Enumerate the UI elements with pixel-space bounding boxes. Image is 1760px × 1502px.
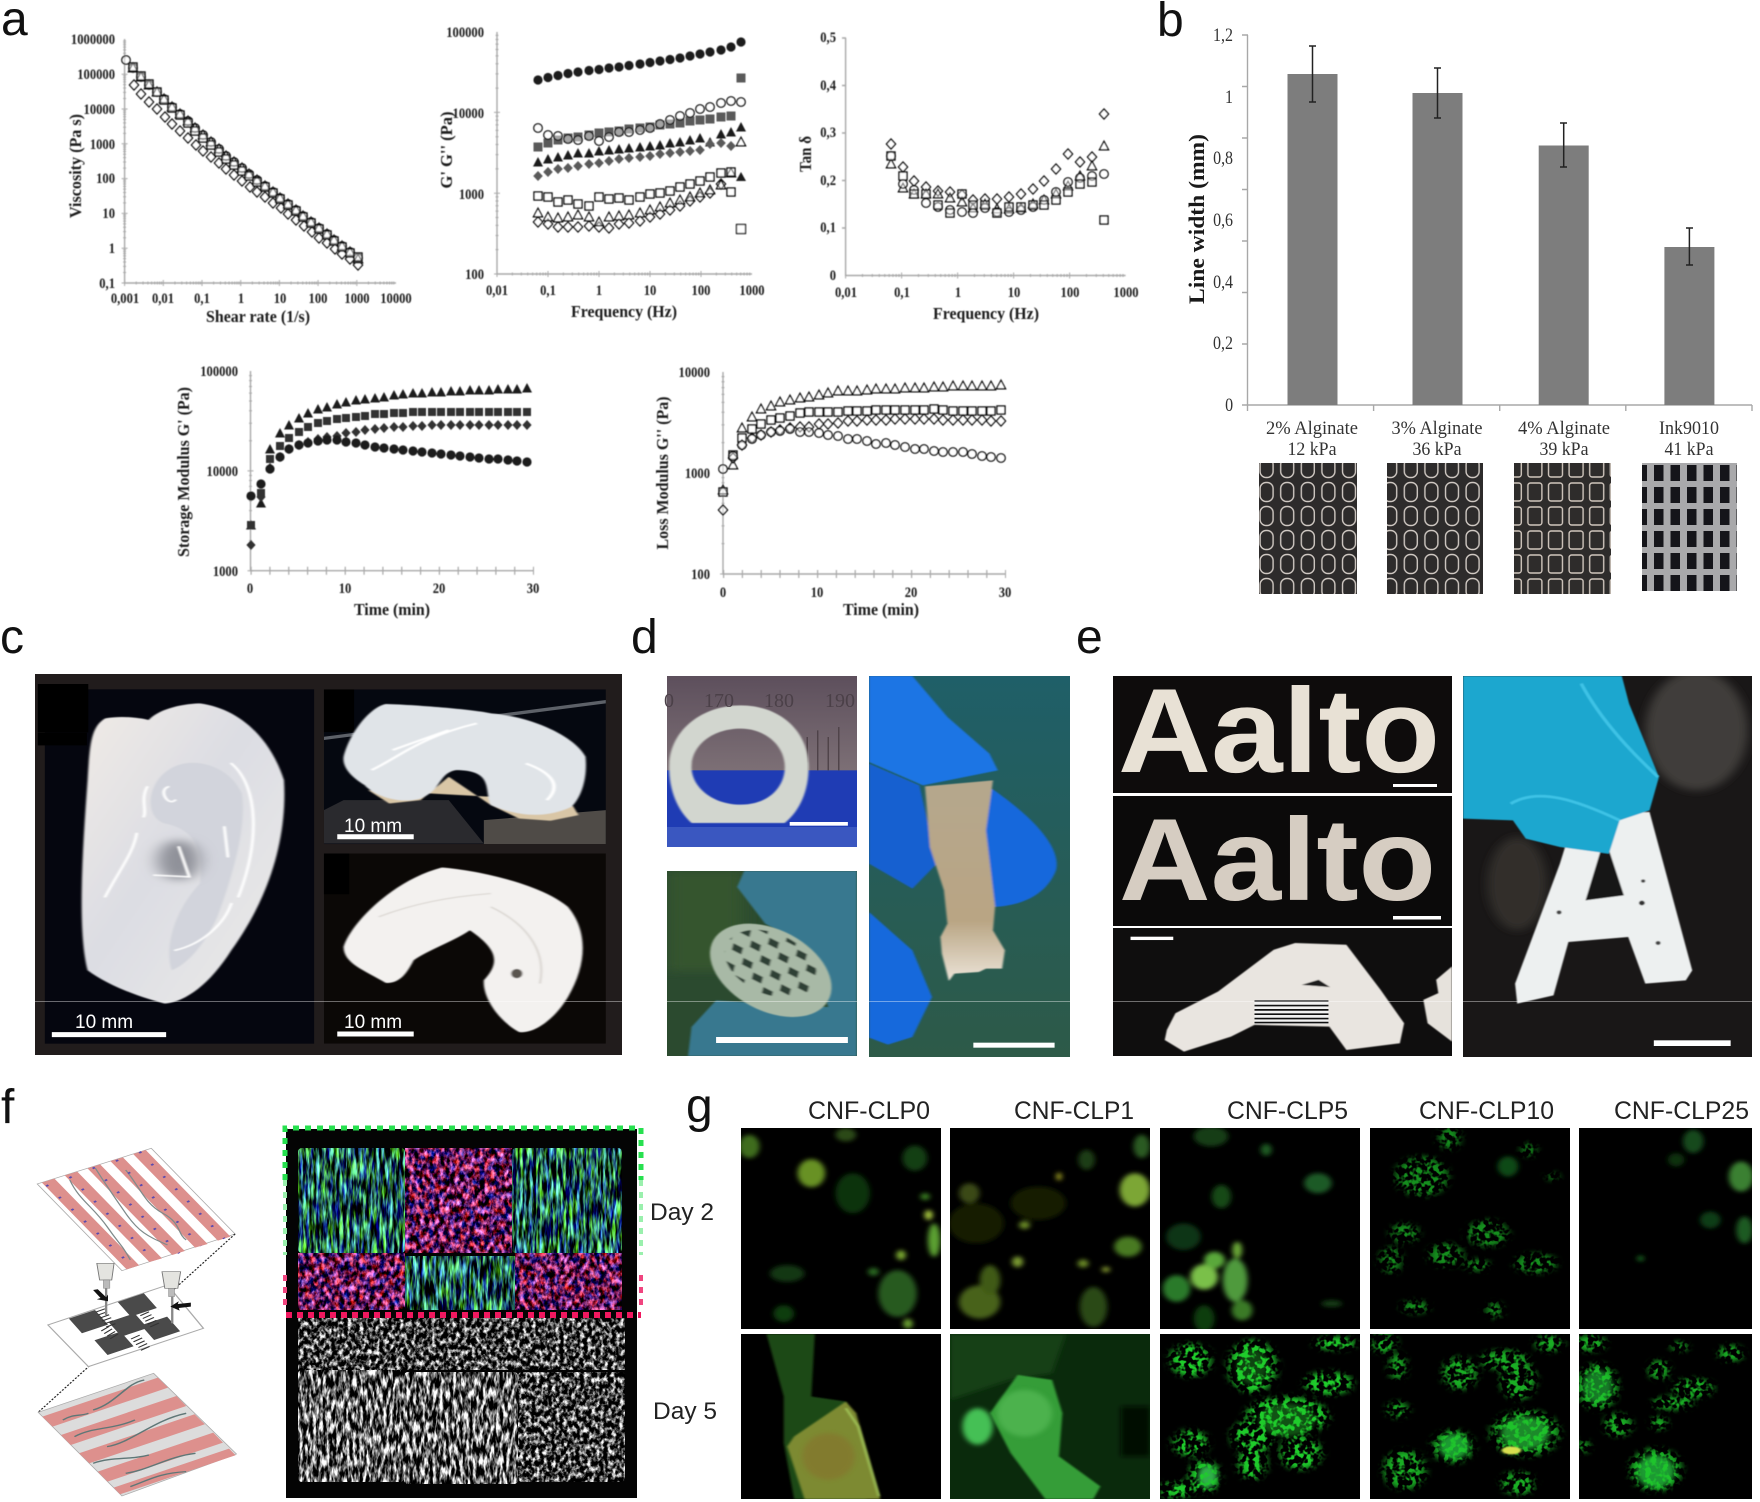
scale labels: 10 mm: [344, 816, 402, 837]
chart: G' and G'' versus frequency: 1000: [739, 282, 765, 298]
dotted projection line: [38, 1234, 235, 1412]
chart: viscosity versus shear rate: 1000000: [71, 31, 115, 47]
y axis title: Line width (mm): [1184, 134, 1209, 304]
column headings for g: CNF-CLP5: [1227, 1097, 1348, 1125]
panel e: printed letters, top: Aalto: [1118, 664, 1440, 798]
ruler numbers: 180: [764, 690, 794, 712]
chart: tan delta versus frequency: 1000: [1113, 284, 1139, 300]
chart: loss modulus versus time: [653, 364, 1011, 619]
error bars: [1309, 46, 1693, 265]
y axis numbers: 0: [1225, 394, 1233, 415]
chart: loss modulus versus time: Time (min): [843, 600, 919, 619]
chart: tan delta versus frequency: 0,5: [820, 29, 836, 45]
micrograph: CLP1 day 2: [950, 1128, 1150, 1329]
chart: viscosity versus shear rate: Viscosity (Pa s): [66, 114, 85, 218]
chart: viscosity versus shear rate: 0,001: [111, 290, 139, 306]
chart: tan delta versus frequency: Tan δ: [796, 136, 815, 172]
chart: G' and G'' versus frequency: 100000: [446, 24, 484, 40]
chart: loss modulus versus time: 30: [999, 584, 1011, 600]
chart: storage modulus versus time: 10000: [207, 463, 238, 479]
column headings for g: CNF-CLP1: [1014, 1097, 1134, 1125]
printed grid thumbnails: [1259, 463, 1737, 594]
faint horizontal seam across photos: [35, 1000, 1752, 1002]
day labels for f: [650, 1199, 717, 1425]
day 2 colour-coded tiles: [298, 1148, 622, 1310]
panel label g: g: [686, 1080, 713, 1133]
panel c: printed ear photographs: [35, 674, 622, 1055]
ear, front view: [82, 703, 284, 1004]
chart: tan delta versus frequency: 0,01: [835, 284, 857, 300]
ruler numbers: 0: [664, 690, 674, 712]
scale labels: 10 mm: [75, 1012, 133, 1033]
chart: tan delta versus frequency: 1: [955, 284, 961, 300]
chart: viscosity versus shear rate: 1: [109, 240, 115, 256]
panel e: printed letters, middle: Aalto: [1119, 794, 1436, 925]
category labels: 41 kPa: [1664, 439, 1714, 460]
micrograph: CLP0 day 2: [741, 1128, 941, 1329]
chart: storage modulus versus time: Time (min): [354, 600, 430, 619]
chart: viscosity versus shear rate: 10: [102, 205, 115, 221]
ruler numbers: 170: [704, 690, 734, 712]
category labels: 2% Alginate: [1266, 418, 1358, 439]
red dotted divider: [286, 1312, 641, 1318]
top right view: [324, 690, 606, 844]
chart: G' and G'' versus frequency: 10: [644, 282, 656, 298]
scale labels: [75, 816, 402, 1033]
chart: tan delta versus frequency: 0,2: [820, 172, 836, 188]
panel label c: c: [0, 611, 24, 664]
category labels: [1266, 418, 1719, 460]
bars: [1288, 74, 1714, 405]
chart: viscosity versus shear rate: 100000: [77, 66, 115, 82]
chart: tan delta versus frequency: Frequency (Hz): [933, 304, 1039, 323]
y axis numbers: [1213, 24, 1233, 415]
panel label d: d: [631, 611, 658, 664]
printing plate with checker pattern: [48, 1285, 203, 1367]
chart: G' and G'' versus frequency: 0,01: [486, 282, 508, 298]
micrograph: CLP5 day 5: [1160, 1334, 1360, 1499]
column headings for g: CNF-CLP10: [1419, 1097, 1554, 1125]
chart: loss modulus versus time: 10000: [679, 364, 710, 380]
chart: tan delta versus frequency: 0,4: [820, 77, 836, 93]
day 5 greyscale tiles: [298, 1318, 625, 1484]
scale labels: 10 mm: [344, 1012, 402, 1033]
panel label e: e: [1076, 611, 1103, 664]
chart: storage modulus versus time: 0: [247, 580, 253, 596]
chart: storage modulus versus time: Storage Modulus G' (Pa): [174, 387, 193, 557]
chart: viscosity versus shear rate: 0,1: [99, 275, 115, 291]
bottom right view: [324, 854, 606, 1044]
chart: storage modulus versus time: [174, 363, 539, 619]
chart: storage modulus versus time: 20: [433, 580, 445, 596]
panel label f: f: [1, 1081, 15, 1134]
column headings for g: CNF-CLP25: [1614, 1097, 1749, 1125]
category labels: 39 kPa: [1540, 439, 1589, 460]
chart: G' and G'' versus frequency: Frequency (Hz): [571, 302, 677, 321]
scale bars: [52, 837, 414, 1035]
chart: tan delta versus frequency: 100: [1061, 284, 1080, 300]
category labels: 36 kPa: [1412, 439, 1462, 460]
chart: loss modulus versus time: 100: [691, 566, 710, 582]
chart: viscosity versus shear rate: 10000: [84, 101, 115, 117]
chart: loss modulus versus time: Loss Modulus G'' (Pa): [653, 396, 672, 550]
chart: viscosity versus shear rate: 1: [238, 290, 244, 306]
chart: viscosity versus shear rate: 1000: [344, 290, 370, 306]
chart: viscosity versus shear rate: [66, 31, 412, 326]
day labels for f: Day 5: [653, 1398, 717, 1425]
category labels: 12 kPa: [1288, 439, 1337, 460]
direction arrows: [93, 1289, 191, 1311]
ruler numbers: 190: [825, 690, 855, 712]
micrograph: CLP10 day 5: [1370, 1334, 1570, 1499]
chart: G' and G'' versus frequency: 10000: [453, 105, 484, 121]
chart: tan delta versus frequency: 0,1: [894, 284, 910, 300]
chart: G' and G'' versus frequency: G' G'' (Pa): [437, 112, 456, 188]
y axis numbers: 0,2: [1213, 332, 1233, 353]
chart: loss modulus versus time: 10: [811, 584, 823, 600]
panel f: tissue construct micrograph: [285, 1128, 641, 1498]
chart: storage modulus versus time: 100000: [200, 363, 238, 379]
panel d: ring on ruler photo: [667, 676, 857, 847]
column headings for g: CNF-CLP0: [808, 1097, 930, 1125]
micrograph: CLP10 day 2: [1370, 1128, 1570, 1329]
chart: G' and G'' versus frequency: 0,1: [540, 282, 556, 298]
chart: G' and G'' versus frequency: 100: [692, 282, 711, 298]
chart: storage modulus versus time: 1000: [213, 563, 238, 579]
micrograph: CLP25 day 2: [1579, 1128, 1752, 1329]
chart: G' and G'' versus frequency: [437, 24, 765, 321]
micrograph: CLP0 day 5: [741, 1334, 941, 1499]
y axis numbers: 1,2: [1213, 24, 1233, 45]
schematic: bioprinted layers: [37, 1148, 236, 1496]
ruler numbers: [664, 690, 855, 712]
printing nozzles: [97, 1263, 181, 1323]
y axis numbers: 1: [1225, 86, 1233, 107]
chart: storage modulus versus time: 10: [339, 580, 351, 596]
chart: viscosity versus shear rate: 1000: [90, 136, 115, 152]
day labels for f: Day 2: [650, 1199, 714, 1226]
chart: G' and G'' versus frequency: 1000: [459, 186, 484, 202]
chart: tan delta versus frequency: [796, 29, 1139, 323]
green dotted frame: [285, 1128, 641, 1180]
chart: loss modulus versus time: 0: [720, 584, 726, 600]
chart: loss modulus versus time: 20: [905, 584, 917, 600]
y axis numbers: 0,6: [1213, 209, 1233, 230]
chart: viscosity versus shear rate: 100: [309, 290, 328, 306]
chart: viscosity versus shear rate: 0,01: [152, 290, 174, 306]
column headings for g: [808, 1097, 1749, 1125]
micrograph: CLP25 day 5: [1579, 1334, 1752, 1499]
chart: tan delta versus frequency: 0,3: [820, 124, 836, 140]
chart: viscosity versus shear rate: Shear rate (1/s): [206, 307, 310, 326]
bottom layer sheet: [38, 1373, 236, 1496]
chart: viscosity versus shear rate: 10: [274, 290, 286, 306]
chart: viscosity versus shear rate: 100: [96, 170, 115, 186]
top layer sheet: [37, 1148, 235, 1271]
micrograph: CLP5 day 2: [1160, 1128, 1360, 1329]
chart: storage modulus versus time: 30: [527, 580, 539, 596]
bar chart: line width by ink: [1184, 24, 1752, 594]
category labels: Ink9010: [1659, 418, 1719, 439]
chart: tan delta versus frequency: 10: [1008, 284, 1020, 300]
chart: G' and G'' versus frequency: 100: [465, 266, 484, 282]
chart: tan delta versus frequency: 0,1: [820, 219, 836, 235]
chart: viscosity versus shear rate: 0,1: [194, 290, 210, 306]
chart: G' and G'' versus frequency: 1: [596, 282, 602, 298]
y axis numbers: 0,4: [1213, 271, 1233, 292]
chart: viscosity versus shear rate: 10000: [380, 290, 412, 306]
panel e: gloved hand holding letter A: [1463, 676, 1752, 1057]
y axis numbers: 0,8: [1213, 147, 1233, 168]
chart: loss modulus versus time: 1000: [685, 465, 710, 481]
category labels: 4% Alginate: [1518, 418, 1610, 439]
category labels: 3% Alginate: [1392, 418, 1482, 439]
panel d: lattice dome photo: [667, 871, 857, 1056]
micrograph: CLP1 day 5: [950, 1334, 1150, 1499]
panel d: gloved hand holding tube photo: [869, 676, 1070, 1057]
chart: tan delta versus frequency: 0: [830, 267, 836, 283]
panel e: printed letter close-up: [1113, 928, 1452, 1056]
